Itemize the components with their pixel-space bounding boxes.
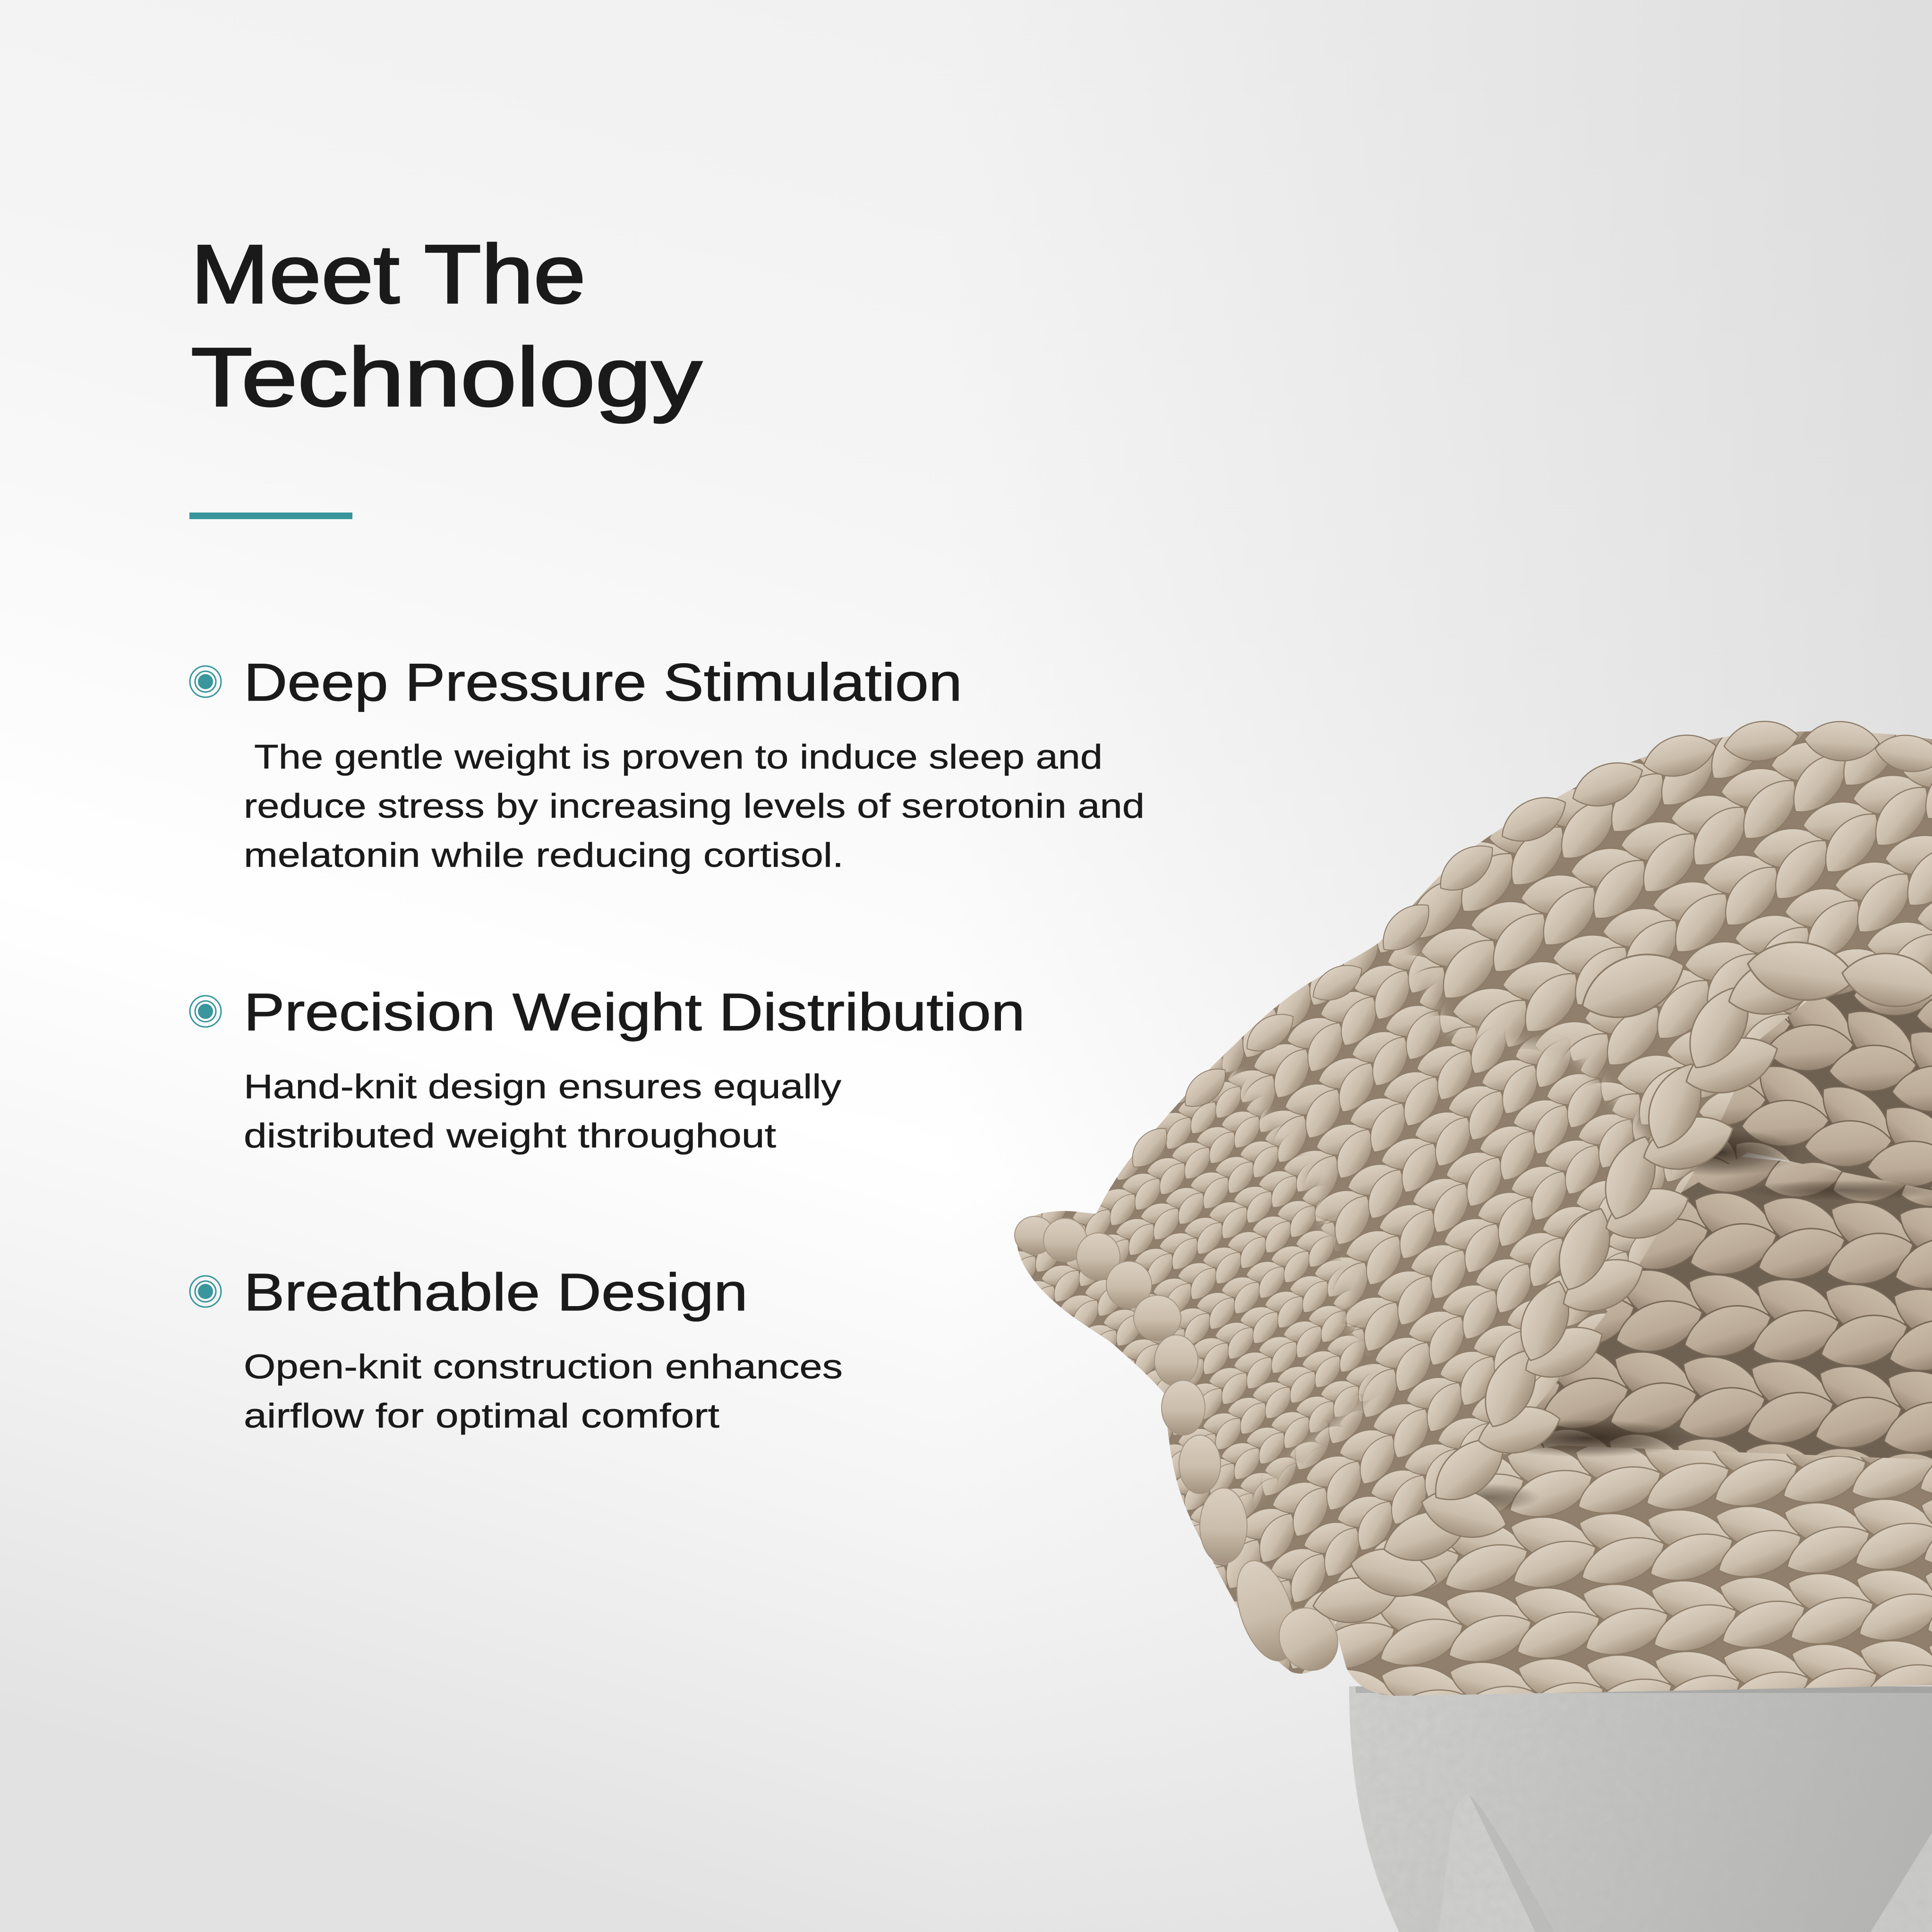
heading: Breathable Design: [244, 1263, 748, 1322]
icon: target bullet: [190, 1276, 221, 1307]
body text: [244, 738, 1145, 874]
fold shadows: [1436, 1129, 1932, 1512]
body text: The gentle weight is proven to induce sleep and: [254, 738, 1103, 776]
blanket top sheet: [992, 709, 1932, 1701]
body text: distributed weight throughout: [244, 1117, 776, 1155]
knit blanket: [992, 709, 1932, 1701]
title accent rule: [189, 513, 352, 519]
blanket front lip braid: [1310, 935, 1932, 1628]
heading: Precision Weight Distribution: [244, 983, 1025, 1042]
body text: [244, 1068, 841, 1155]
blanket bottom layer: [1334, 1431, 1932, 1696]
body text: airflow for optimal comfort: [244, 1397, 719, 1435]
feature: Precision Weight Distribution: [190, 983, 1025, 1155]
feature: Deep Pressure Stimulation: [190, 653, 1145, 874]
heading: Deep Pressure Stimulation: [244, 653, 962, 712]
body text: [244, 1348, 843, 1435]
blanket top edge strands: [1124, 717, 1932, 1175]
title: [191, 228, 702, 424]
blanket left tip lumps: [1015, 1216, 1349, 1681]
icon: target bullet: [190, 666, 221, 697]
feature: Breathable Design: [190, 1263, 843, 1435]
body text: Open-knit construction enhances: [244, 1348, 843, 1386]
icon: target bullet: [190, 996, 221, 1027]
title: Technology: [191, 331, 702, 424]
concrete stool: [1349, 1686, 1932, 1932]
blanket middle layer: [1441, 1153, 1932, 1464]
body text: melatonin while reducing cortisol.: [244, 837, 844, 874]
blanket inner fold layer: [1681, 973, 1932, 1193]
title: Meet The: [191, 228, 586, 321]
body text: Hand-knit design ensures equally: [244, 1068, 841, 1106]
body text: reduce stress by increasing levels of serotonin and: [244, 787, 1145, 825]
